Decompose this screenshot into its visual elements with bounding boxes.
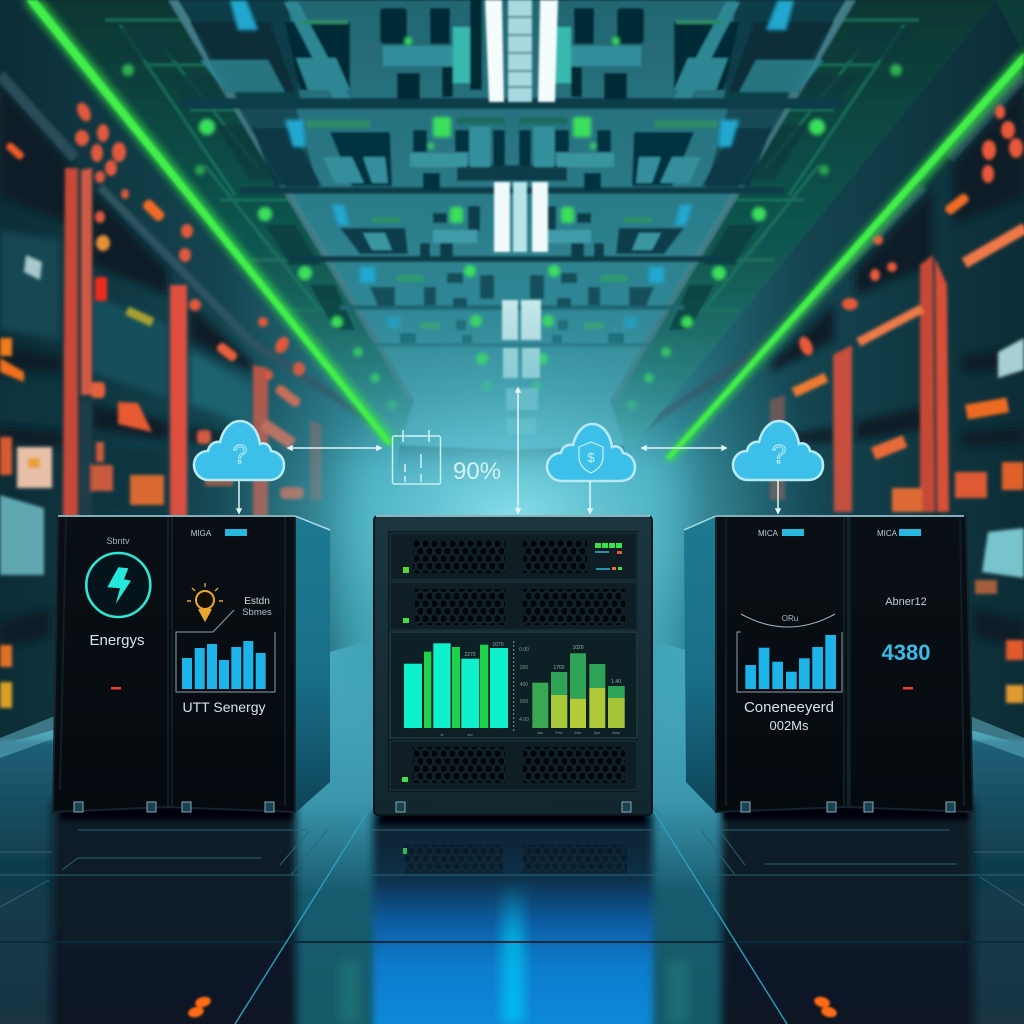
haze behind servers <box>345 450 680 680</box>
panel: bar chart with curve: 002Ms <box>769 718 809 733</box>
rack feet <box>396 802 631 812</box>
bar chart: cyan and green <box>404 642 508 737</box>
left server cabinet <box>53 515 330 813</box>
cloud icon: question, left <box>194 421 284 480</box>
cloud icon: question, right: ? <box>772 439 786 469</box>
stacked bar chart: green and lime: 500 <box>520 699 528 705</box>
arrows <box>237 388 780 513</box>
stacked bar chart: green and lime: May <box>612 730 620 735</box>
arrow: left cloud down <box>237 481 241 513</box>
panel: bar chart with curve: Coneneeyerd <box>744 699 834 716</box>
cloud icon: shield, middle: $ <box>587 450 595 465</box>
left wall: lit panels <box>0 230 252 512</box>
reflection of rack fans <box>405 845 627 873</box>
arrow: middle cloud to right cloud <box>642 446 726 450</box>
panel: bar chart with bulb: Sbmes <box>242 607 272 618</box>
rack unit 4 <box>390 741 637 790</box>
panel: bar chart with bulb <box>176 529 275 715</box>
floor <box>0 640 1024 1024</box>
ceiling: light fixtures <box>485 0 558 434</box>
fog: central glow <box>167 285 857 755</box>
panel: bar chart with bulb: MIGA <box>191 529 212 538</box>
green light beam right <box>664 48 1024 462</box>
rack unit 1 <box>390 533 637 580</box>
central server rack <box>374 516 652 815</box>
right server cabinet <box>684 515 973 813</box>
icon: calendar <box>392 430 440 484</box>
right wall: server racks <box>624 0 1024 750</box>
stacked bar chart: green and lime: 1.40 <box>611 679 621 685</box>
stat: 90%: 90% <box>453 458 501 485</box>
rack unit 2 <box>390 582 637 630</box>
stacked bar chart: green and lime: Jan <box>537 730 543 735</box>
bar chart: cyan and green: 2270 <box>464 652 476 658</box>
panel: bar chart with curve: ORu <box>782 614 798 623</box>
stacked bar chart: green and lime: 200 <box>520 665 528 671</box>
stacked bar chart: green and lime: Mar <box>575 730 582 735</box>
stacked bar chart: green and lime <box>519 645 625 735</box>
arrow: middle cloud down <box>588 481 592 513</box>
panel: bar chart with curve: MICA <box>758 529 779 538</box>
cabinet feet <box>741 802 955 812</box>
cloud icon: question, left: ? <box>233 439 247 469</box>
left wall: server racks <box>0 0 400 750</box>
shadows under cabinets <box>60 802 968 824</box>
stacked bar chart: green and lime: 0.00 <box>519 647 529 653</box>
stacked bar chart: green and lime: 4.00 <box>519 717 529 723</box>
icon: light bulb <box>187 583 223 620</box>
stacked bar chart: green and lime: 400 <box>520 682 528 688</box>
left wall: orange indicators <box>0 100 322 708</box>
stacked bar chart: green and lime: Feb <box>556 730 563 735</box>
stacked bar chart: green and lime: 1020 <box>572 645 584 651</box>
panel: readout 4380: MICA <box>877 529 898 538</box>
stacked bar chart: green and lime: 1702 <box>553 665 565 671</box>
panel: bar chart with curve <box>737 529 842 733</box>
rack unit 3: chart display <box>390 632 637 738</box>
panel: readout 4380: 4380 <box>882 640 930 665</box>
panel: energy gauge <box>86 536 150 690</box>
arrow: vertical centre <box>516 388 520 513</box>
panel: energy gauge: Sbntv <box>106 536 130 546</box>
floor: orange marker left <box>187 995 212 1019</box>
ceiling: network grid in perspective <box>0 0 1024 460</box>
bar chart: cyan and green: sol <box>467 732 473 737</box>
arrow: right cloud down <box>776 480 780 513</box>
cloud icon: shield, middle <box>547 424 635 481</box>
panel: readout 4380 <box>877 529 930 690</box>
panel: bar chart with bulb: Estdn <box>244 596 270 607</box>
bar chart: cyan and green: ts <box>440 732 444 737</box>
right wall: orange indicators <box>770 105 1024 703</box>
panel: energy gauge: Energys <box>89 632 145 649</box>
floor: orange marker right <box>813 995 838 1019</box>
bar chart: cyan and green: 1070 <box>492 642 504 648</box>
panel: bar chart with bulb: UTT Senergy <box>182 699 266 715</box>
stacked bar chart: green and lime: Apr <box>594 730 601 735</box>
cloud icon: question, right <box>733 421 823 480</box>
cabinet feet <box>74 802 274 812</box>
arrow: left cloud to calendar <box>288 446 381 450</box>
green light beam left <box>22 0 396 446</box>
panel: readout 4380: Abner12 <box>885 596 927 608</box>
